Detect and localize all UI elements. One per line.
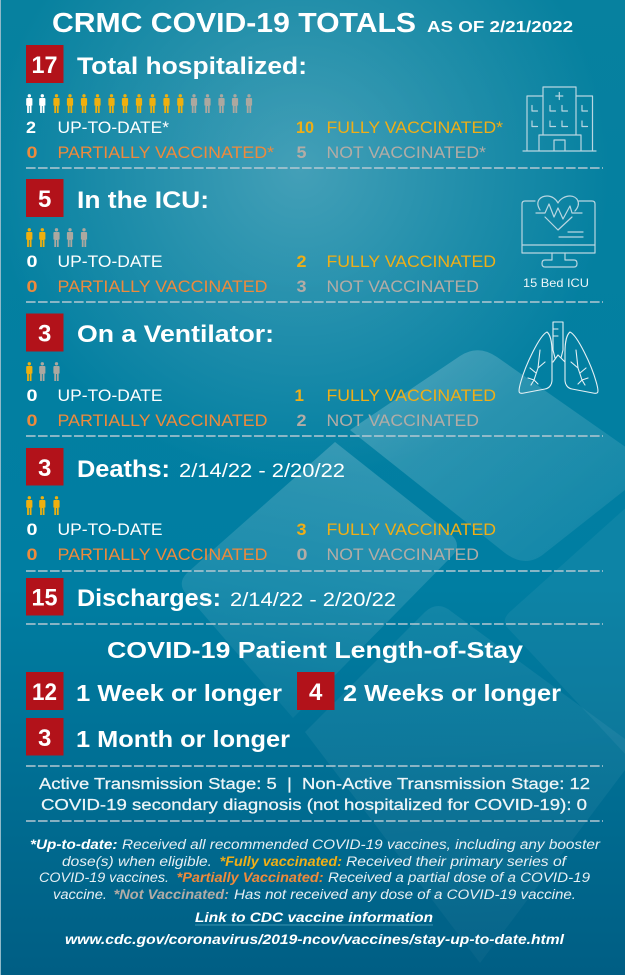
heading: deaths with date range: 2/14/22 - 2/20/22 xyxy=(179,460,345,482)
vaccination counts: 5 xyxy=(296,143,306,162)
vaccination counts: 0 xyxy=(26,545,38,564)
vaccination counts: FULLY VACCINATED xyxy=(326,386,496,405)
transmission stage summary: Active Transmission Stage: 5 | Non-Active Transmission Stage: 12 xyxy=(39,776,590,793)
footnote: vaccination definitions: *Up-to-date: xyxy=(30,837,118,852)
heading: discharges with date range xyxy=(77,585,396,612)
icon: ICU monitor with heart xyxy=(522,196,595,267)
icon: hospital xyxy=(523,87,596,151)
stat: 1 week or longer xyxy=(26,672,282,710)
vaccination counts: 0 xyxy=(26,411,38,430)
vaccination counts: 0 xyxy=(296,545,308,564)
link: CDC vaccine information: www.cdc.gov/coronavirus/2019-ncov/vaccines/stay-up-to-date.html xyxy=(65,932,564,947)
badge: 5 xyxy=(26,179,64,217)
vaccination counts: 0 xyxy=(26,252,38,271)
footnote: vaccination definitions: vaccine. xyxy=(53,887,107,902)
vaccination counts: FULLY VACCINATED* xyxy=(326,118,503,137)
footnote: vaccination definitions: Received all recommended COVID-19 vaccines, including any booster xyxy=(122,837,601,852)
footnote: vaccination definitions: Received a partial dose of a COVID-19 xyxy=(328,870,591,885)
vaccination counts: 2 xyxy=(26,118,36,137)
heading: discharges with date range: 2/14/22 - 2/20/22 xyxy=(230,589,396,611)
badge: 5: 5 xyxy=(38,186,51,213)
vaccination counts: NOT VACCINATED xyxy=(326,545,479,564)
heading: length of stay: COVID-19 Patient Length-of-Stay xyxy=(107,637,523,663)
title: AS OF 2/21/2022 xyxy=(427,19,573,36)
vaccination counts: NOT VACCINATED xyxy=(326,277,479,296)
caption: 15 bed ICU: 15 Bed ICU xyxy=(523,276,589,290)
vaccination counts: 0 xyxy=(26,277,38,296)
stat: 2 weeks or longer: 4 xyxy=(309,679,323,706)
vaccination counts: 3 xyxy=(296,520,306,539)
title xyxy=(52,7,573,38)
heading: total hospitalized: Total hospitalized: xyxy=(77,53,307,80)
panel: in the ICU xyxy=(26,179,595,296)
footnote: vaccination definitions xyxy=(30,837,601,902)
vaccination counts: 0 xyxy=(26,143,38,162)
vaccination counts: UP-TO-DATE* xyxy=(58,118,169,137)
stat: 1 week or longer: 12 xyxy=(32,679,57,706)
stat: 1 month or longer: 1 Month or longer xyxy=(76,726,290,752)
vaccination counts: UP-TO-DATE xyxy=(58,520,162,539)
stat: 1 week or longer: 1 Week or longer xyxy=(76,680,282,706)
vaccination counts xyxy=(26,386,496,430)
vaccination counts: PARTIALLY VACCINATED xyxy=(58,545,268,564)
vaccination counts: 10 xyxy=(296,118,314,137)
person icons: 17 patients xyxy=(26,94,252,113)
transmission stage summary: COVID-19 secondary diagnosis (not hospitalized for COVID-19): 0 xyxy=(41,797,587,814)
heading: on a ventilator: On a Ventilator: xyxy=(77,321,274,348)
badge: 3 xyxy=(26,448,64,486)
footnote: vaccination definitions: Received their primary series of xyxy=(346,854,567,869)
vaccination counts: 2 xyxy=(296,252,306,271)
vaccination counts: NOT VACCINATED xyxy=(326,411,479,430)
panel: discharges xyxy=(26,578,396,616)
footnote: vaccination definitions: *Not Vaccinated: xyxy=(114,887,229,902)
vaccination counts: FULLY VACCINATED xyxy=(326,520,496,539)
panel: deaths xyxy=(26,448,496,564)
vaccination counts: UP-TO-DATE xyxy=(58,252,162,271)
vaccination counts: NOT VACCINATED* xyxy=(326,143,486,162)
stat: 1 month or longer xyxy=(26,718,290,756)
link: CDC vaccine information: Link to CDC vaccine information xyxy=(195,910,433,925)
stat: 2 weeks or longer xyxy=(297,672,561,710)
vaccination counts: 2 xyxy=(296,411,306,430)
vaccination counts: 0 xyxy=(26,520,38,539)
badge: 3 xyxy=(26,314,64,352)
footnote: vaccination definitions: dose(s) when eligible. xyxy=(62,854,212,869)
panel: on a ventilator xyxy=(26,314,598,430)
badge: 15 xyxy=(26,578,64,616)
person icons: 3 patients xyxy=(26,362,60,381)
vaccination counts xyxy=(26,118,503,162)
panel: total hospitalized xyxy=(26,45,596,162)
badge: 3: 3 xyxy=(38,320,51,348)
panel: length of stay xyxy=(26,637,561,756)
stat: 2 weeks or longer: 2 Weeks or longer xyxy=(343,680,561,706)
vaccination counts: FULLY VACCINATED xyxy=(326,252,496,271)
badge: 17 xyxy=(26,45,64,83)
vaccination counts: PARTIALLY VACCINATED xyxy=(58,411,268,430)
footnote: vaccination definitions: *Partially Vaccinated: xyxy=(177,870,324,885)
vaccination counts: PARTIALLY VACCINATED* xyxy=(58,143,274,162)
link: CDC vaccine information xyxy=(65,910,564,947)
badge: 17: 17 xyxy=(32,52,58,79)
person icons: 5 patients xyxy=(26,228,87,247)
badge: 15: 15 xyxy=(32,584,58,612)
person icons: 3 patients xyxy=(26,496,60,515)
vaccination counts: 1 xyxy=(294,386,304,405)
heading: deaths with date range: Deaths: xyxy=(77,456,170,483)
vaccination counts: PARTIALLY VACCINATED xyxy=(58,277,268,296)
vaccination counts: 0 xyxy=(26,386,38,405)
heading: discharges with date range: Discharges: xyxy=(77,585,221,612)
vaccination counts xyxy=(26,520,496,564)
stat: 1 month or longer: 3 xyxy=(38,725,51,752)
title: CRMC COVID-19 TOTALS xyxy=(52,7,416,38)
heading: in the ICU: In the ICU: xyxy=(77,187,209,214)
transmission stage summary xyxy=(39,776,590,814)
footnote: vaccination definitions: *Fully vaccinated: xyxy=(220,854,342,869)
vaccination counts: 3 xyxy=(296,277,306,296)
footnote: vaccination definitions: COVID-19 vaccines. xyxy=(39,870,169,885)
icon: lungs xyxy=(519,322,598,393)
vaccination counts: UP-TO-DATE xyxy=(58,386,162,405)
badge: 3: 3 xyxy=(38,455,51,482)
heading: deaths with date range xyxy=(77,456,345,483)
footnote: vaccination definitions: Has not received any dose of a COVID-19 vaccine. xyxy=(234,887,576,902)
vaccination counts xyxy=(26,252,496,296)
